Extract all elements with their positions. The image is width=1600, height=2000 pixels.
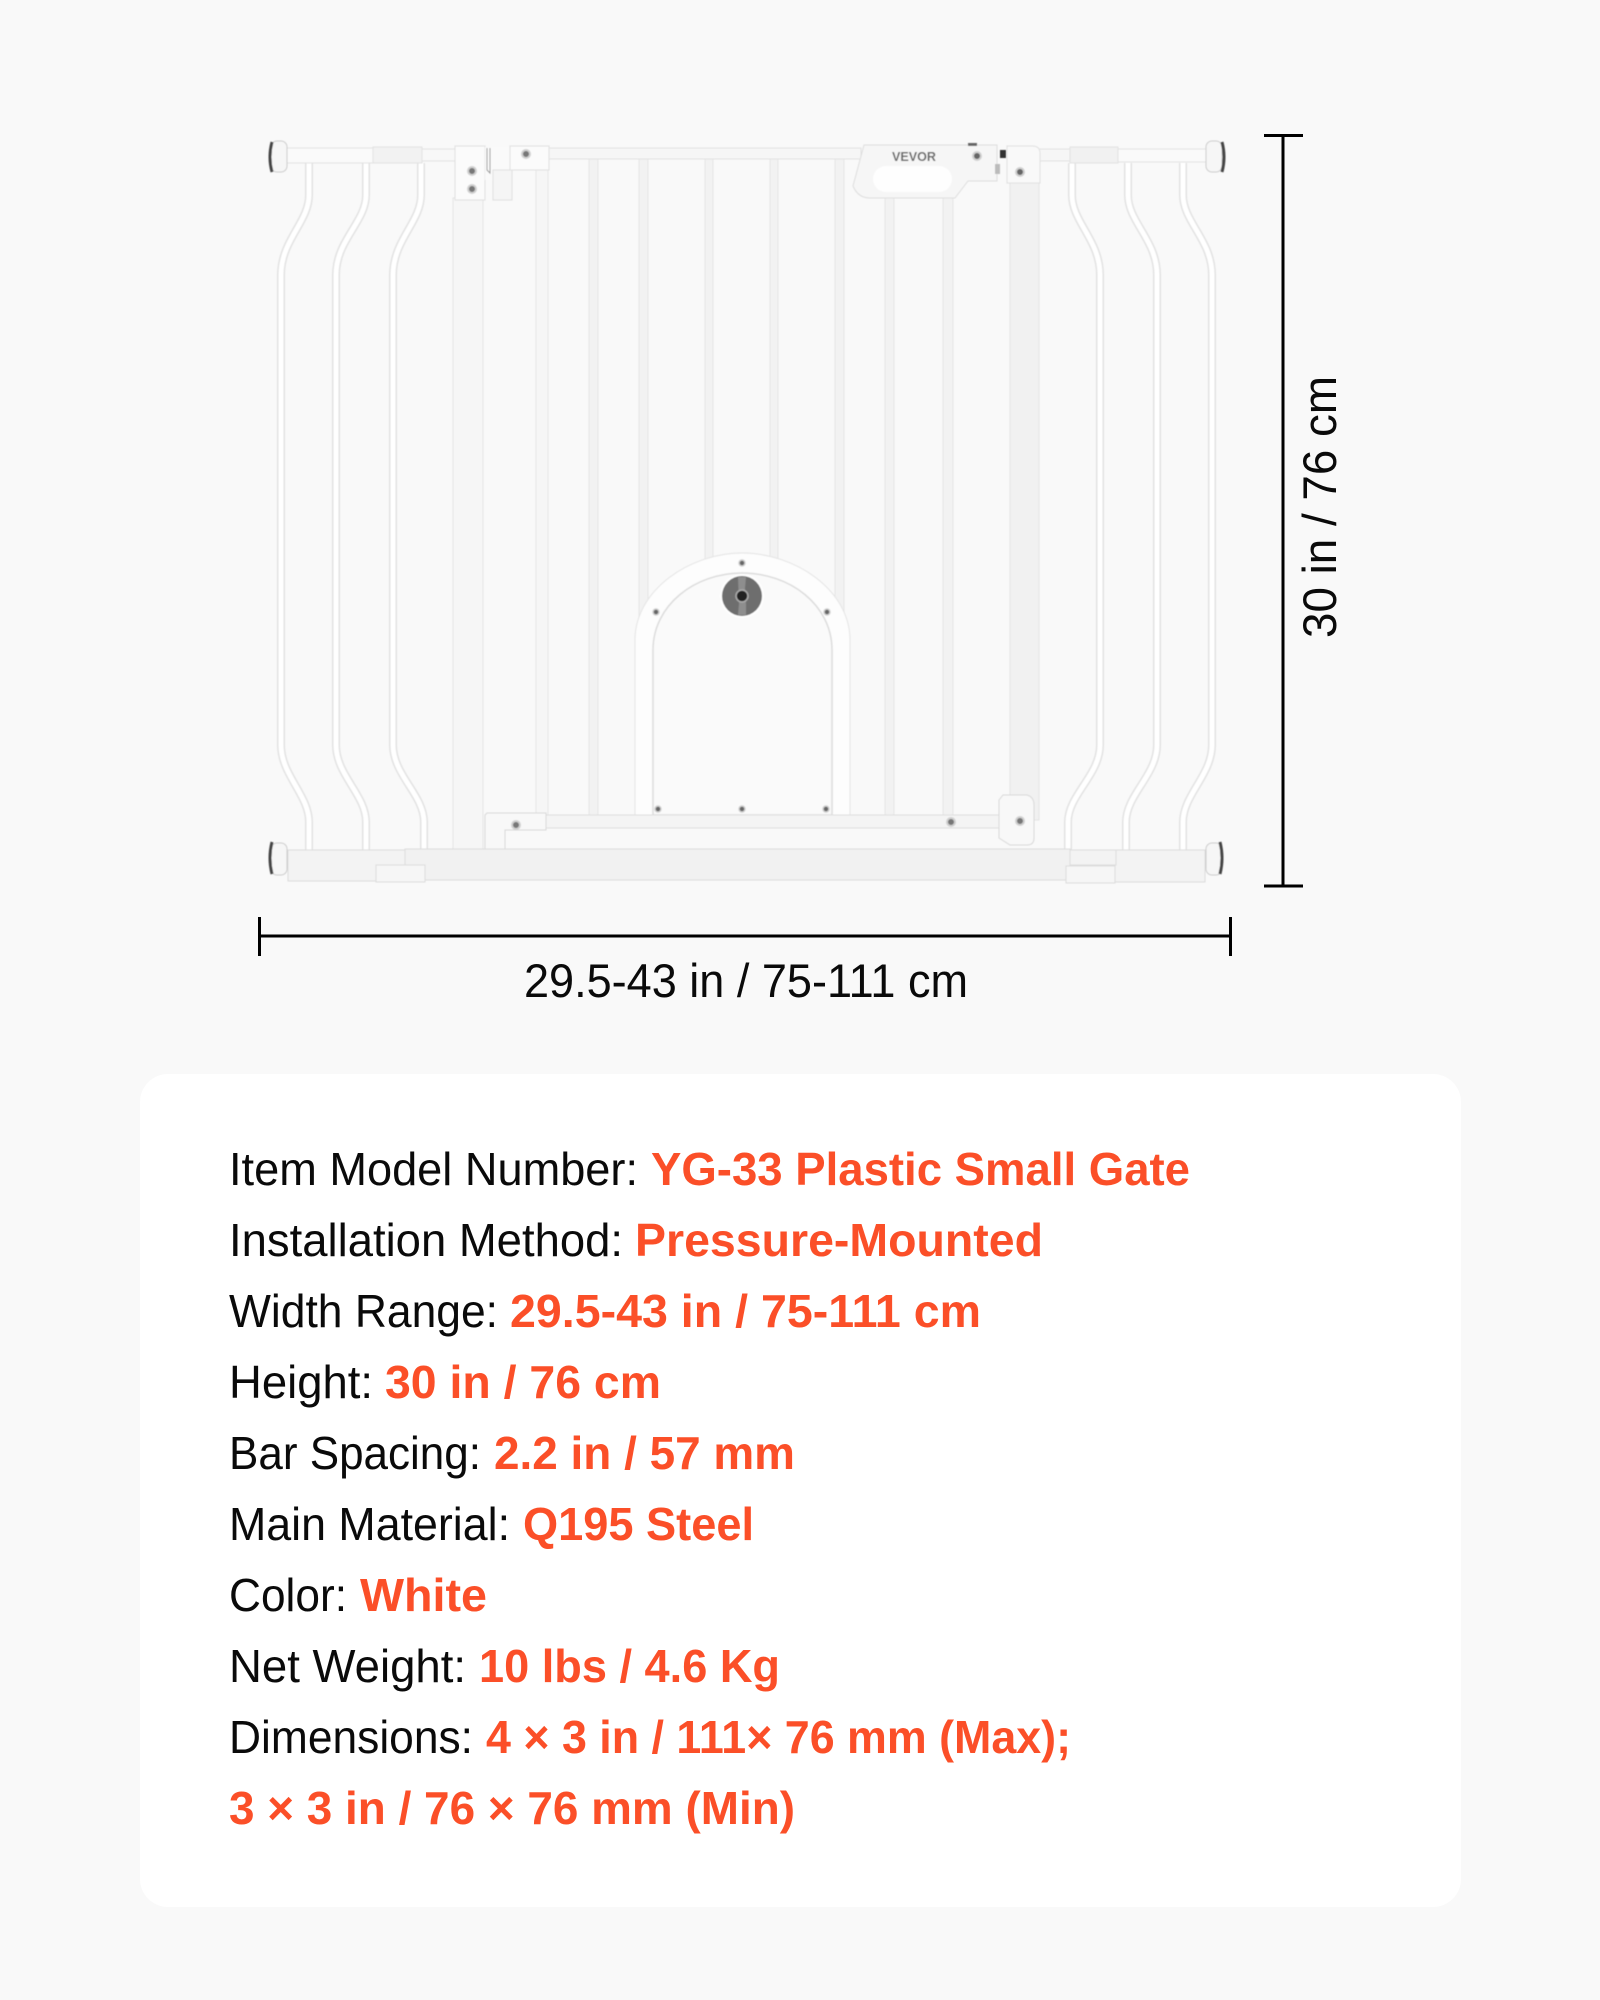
spec: net weight: 10 lbs / 4.6 Kg (479, 1640, 780, 1692)
bottom-left bracket (485, 813, 546, 850)
spec: height (229, 1356, 661, 1408)
spec: installation method: Installation Method: (229, 1214, 623, 1266)
specifications panel (140, 1074, 1461, 1907)
spec: height: 30 in / 76 cm (385, 1356, 661, 1408)
spec: main material: Q195 Steel (523, 1498, 754, 1550)
spec: installation method: Pressure-Mounted (635, 1214, 1043, 1266)
product photo: white pet gate (270, 141, 1224, 883)
bottom rail (288, 849, 1205, 883)
spec: color: Color: (229, 1569, 347, 1621)
right curved extension wires (1068, 163, 1212, 850)
spec: height: Height: (229, 1356, 373, 1408)
gate bottom rail (546, 815, 1001, 828)
height dimension line (1264, 134, 1303, 888)
spec: width range: 29.5-43 in / 75-111 cm (510, 1285, 981, 1337)
spec: item model number (229, 1143, 1190, 1195)
top-left hinge bracket (455, 146, 549, 200)
spec: net weight (229, 1640, 780, 1692)
handle with VEVOR logo (853, 143, 1006, 198)
width dimension label: 29.5-43 in / 75-111 cm (524, 954, 968, 1007)
spec: main material: Main Material: (229, 1498, 510, 1550)
height dimension label: 30 in / 76 cm (1293, 376, 1346, 638)
spec: width range (229, 1285, 981, 1337)
spec: bar spacing (229, 1427, 795, 1479)
handle with VEVOR logo: VEVOR (892, 150, 936, 164)
spec: dimensions continued: 3 × 3 in / 76 × 76 mm (Min) (229, 1782, 795, 1834)
bottom-right bracket (947, 795, 1034, 845)
small pet door (635, 553, 850, 815)
spec: bar spacing: 2.2 in / 57 mm (494, 1427, 795, 1479)
top-right bracket (1007, 146, 1040, 183)
spec: dimensions: 4 × 3 in / 111× 76 mm (Max); (486, 1711, 1071, 1763)
spec: main material (229, 1498, 754, 1550)
spec: dimensions (229, 1711, 1071, 1763)
adjustment knobs (270, 141, 1224, 875)
left curved extension wires (281, 163, 424, 850)
gate vertical bars (536, 155, 953, 825)
spec: item model number: YG-33 Plastic Small Gate (651, 1143, 1190, 1195)
spec: installation method (229, 1214, 1043, 1266)
width dimension line (258, 917, 1232, 956)
fixed posts (453, 180, 1039, 850)
spec: dimensions: Dimensions: (229, 1711, 473, 1763)
spec: item model number: Item Model Number: (229, 1143, 638, 1195)
spec: color (229, 1569, 487, 1621)
spec: net weight: Net Weight: (229, 1640, 466, 1692)
spec: color: White (360, 1569, 487, 1621)
top rail (287, 147, 1206, 163)
spec: bar spacing: Bar Spacing: (229, 1427, 481, 1479)
door lock knob (720, 574, 764, 618)
spec: width range: Width Range: (229, 1285, 498, 1337)
